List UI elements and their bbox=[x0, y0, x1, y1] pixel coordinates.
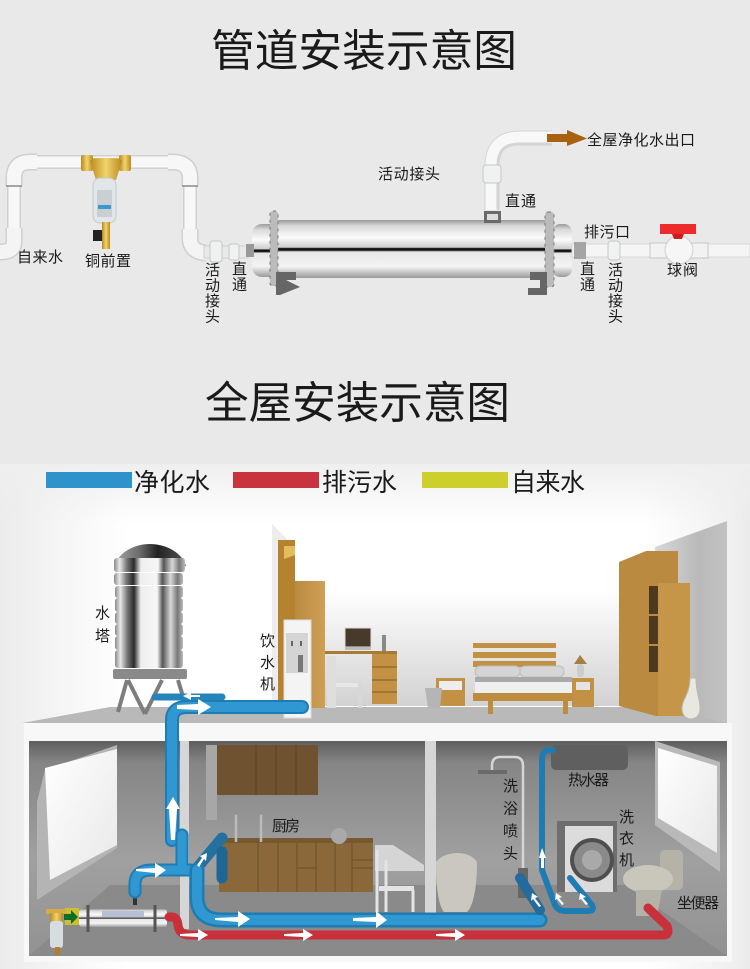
back wall bbox=[29, 741, 727, 956]
labels: 自来水 bbox=[17, 249, 63, 266]
label: water tower: 塔 bbox=[95, 628, 110, 645]
labels: 直 bbox=[232, 261, 247, 278]
legend: 自来水 bbox=[511, 469, 585, 497]
title: pipe installation diagram: 管道安装示意图 bbox=[211, 27, 517, 76]
labels: 直 bbox=[580, 261, 595, 278]
labels: 动 bbox=[205, 278, 220, 294]
labels: 接 bbox=[205, 293, 220, 310]
ball valve bbox=[650, 224, 708, 264]
white inlet pipes bbox=[0, 162, 206, 253]
legend bbox=[46, 469, 585, 497]
labels: 头 bbox=[205, 308, 220, 326]
legend: 排污水 bbox=[322, 469, 397, 497]
labels bbox=[17, 131, 698, 326]
labels: 排污口 bbox=[584, 224, 630, 241]
floor slab bbox=[24, 723, 732, 741]
flow arrows bbox=[136, 692, 588, 941]
arrow: purified water out bbox=[547, 130, 587, 146]
desk with monitor and chair bbox=[325, 628, 397, 708]
labels: 活 bbox=[608, 262, 623, 279]
legend: 净化水 bbox=[134, 469, 210, 497]
room labels: 洗 bbox=[619, 809, 634, 826]
partition wall bbox=[272, 524, 295, 708]
kitchen cabinets bbox=[217, 745, 373, 892]
drain water pipe bbox=[169, 908, 668, 935]
stainless steel ultrafiltration housing bbox=[246, 211, 572, 295]
back wall shading bbox=[295, 590, 655, 706]
labels: 接 bbox=[608, 293, 623, 310]
room labels: 坐便器 bbox=[677, 895, 719, 912]
washing machine bbox=[557, 821, 617, 892]
labels: 全屋净化水出口 bbox=[587, 131, 695, 149]
room labels: 机 bbox=[619, 852, 634, 869]
purified water outlet pipe bbox=[483, 137, 552, 210]
label: water dispenser: 水 bbox=[260, 654, 275, 672]
room labels: 洗 bbox=[503, 778, 518, 795]
left window bbox=[37, 745, 117, 900]
labels: 通 bbox=[232, 276, 247, 294]
right window bbox=[655, 741, 720, 872]
upper floor room bbox=[22, 521, 727, 723]
water tower bbox=[113, 544, 187, 714]
dining table and chairs bbox=[375, 845, 424, 912]
room labels: 头 bbox=[503, 846, 518, 862]
room labels: 喷 bbox=[503, 823, 518, 840]
whole-house filter unit with pre-filter bbox=[46, 893, 167, 955]
water dispenser bbox=[284, 620, 311, 718]
floor bbox=[29, 885, 727, 956]
partition columns bbox=[180, 741, 436, 929]
wardrobe bbox=[619, 551, 690, 716]
bathtub bbox=[436, 853, 477, 912]
drain side pipe bbox=[572, 241, 750, 260]
labels: 通 bbox=[580, 276, 595, 294]
label: water dispenser: 饮 bbox=[260, 633, 275, 650]
vase bbox=[682, 678, 700, 719]
label: water tower: 水 bbox=[95, 605, 110, 622]
diagram: pipe installation bbox=[0, 130, 750, 326]
bed and nightstands bbox=[425, 643, 594, 714]
purified water pipes bbox=[135, 697, 593, 920]
room labels: 厨房 bbox=[272, 818, 300, 835]
labels: 球阀 bbox=[667, 262, 698, 279]
toilet bbox=[623, 850, 683, 916]
title: whole-house installation diagram: 全屋安装示意图 bbox=[205, 379, 510, 428]
door and cabinet bbox=[278, 540, 325, 708]
room labels: 热水器 bbox=[568, 772, 609, 789]
labels: 铜前置 bbox=[85, 253, 131, 270]
labels: 活动接头 bbox=[378, 166, 440, 183]
labels: 活 bbox=[205, 262, 220, 279]
room labels: 浴 bbox=[503, 800, 518, 818]
room labels: 衣 bbox=[619, 830, 634, 848]
labels: 动 bbox=[608, 278, 623, 294]
label: water dispenser: 机 bbox=[260, 676, 275, 693]
water heater bbox=[551, 745, 628, 770]
outer frame of ground floor bbox=[24, 741, 732, 962]
labels: 直通 bbox=[505, 193, 536, 210]
union and straight connector, left bbox=[204, 241, 248, 262]
ground floor room bbox=[29, 692, 727, 956]
floor bbox=[22, 707, 727, 723]
labels: 头 bbox=[608, 308, 623, 326]
right side wall bbox=[655, 521, 727, 723]
house section background bbox=[0, 464, 750, 969]
top section background bbox=[0, 0, 750, 464]
room labels bbox=[272, 772, 719, 912]
brass pre-filter bbox=[81, 155, 131, 249]
shower bbox=[478, 757, 528, 898]
